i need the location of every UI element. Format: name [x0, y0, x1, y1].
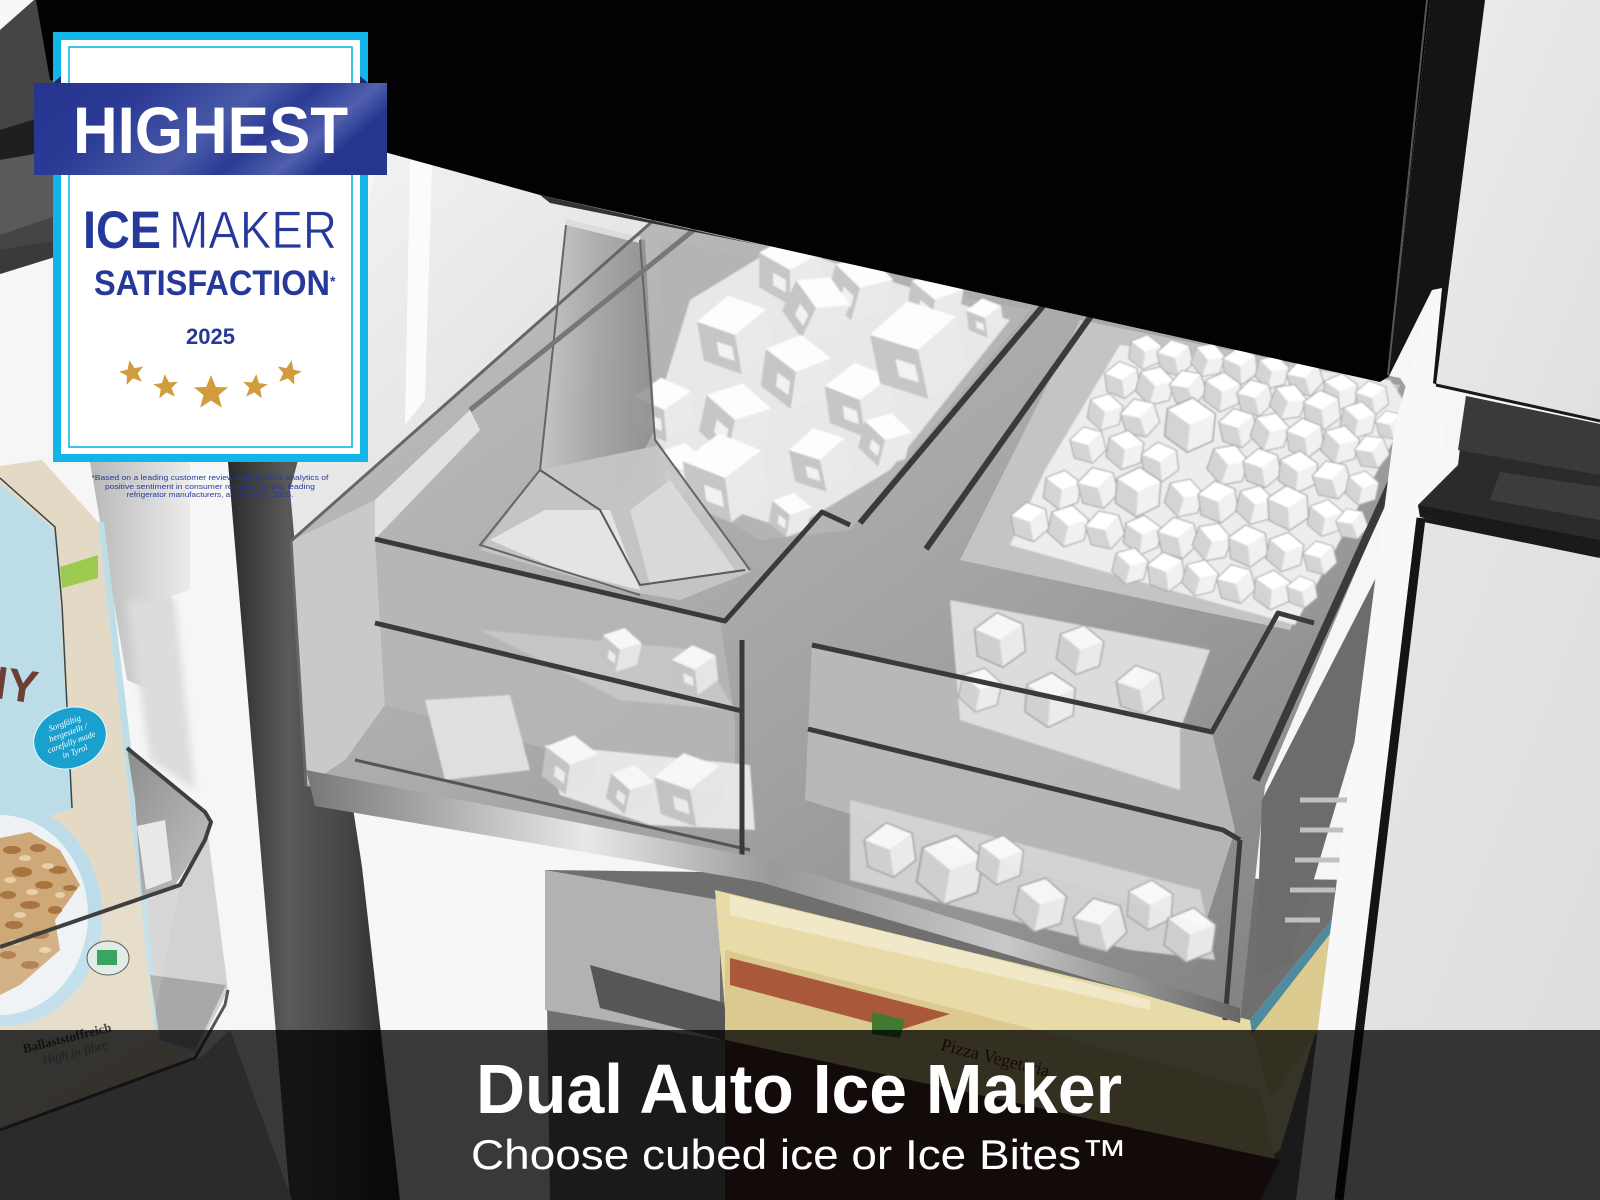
white wall below and above the drawer	[290, 150, 700, 1200]
big ice cubes in left bin	[633, 235, 1010, 541]
black rail between panels	[1418, 396, 1600, 556]
bottom caption bar	[0, 1030, 1600, 1200]
white side strip	[1296, 290, 1462, 1200]
ice drawer	[291, 219, 1423, 1023]
drawer front lip	[306, 770, 1240, 1023]
floor below door shelf	[0, 1030, 292, 1200]
nutrition text	[21, 1019, 117, 1072]
footnote: refrigerator manufacturers, as of April 1, 2025.	[126, 490, 294, 499]
satisfaction: SATISFACTION	[94, 264, 330, 303]
left bin front face	[375, 539, 735, 800]
drawer side rail with ribs	[1255, 560, 1385, 980]
seal: carefully made in Tyrol: in Tyrol	[61, 742, 89, 760]
drawer body	[291, 219, 1423, 1023]
asterisk: *	[330, 273, 336, 289]
ribbon	[34, 76, 387, 175]
caption title: Dual Auto Ice Maker	[476, 1050, 1122, 1128]
ice seen through left bin	[425, 624, 755, 833]
caption subtitle: Choose cubed ice or Ice Bites™	[471, 1131, 1127, 1178]
small ice bites in right bin	[1009, 333, 1410, 625]
door gasket column	[228, 462, 400, 1200]
nutrition text: High in fibre	[40, 1037, 109, 1068]
left bin ice floor	[660, 240, 1030, 540]
seal: carefully made in Tyrol	[25, 697, 115, 779]
footnote: *Based on a leading customer review aggregator's analytics of	[91, 473, 329, 482]
black door panel	[36, 0, 1486, 385]
cereal box	[0, 460, 195, 1130]
right bin front face	[805, 645, 1235, 925]
left freezer wall	[0, 0, 195, 790]
seal: carefully made in Tyrol: Sorgfältig	[47, 713, 82, 733]
pizza box text: Pizza Vegetaria	[939, 1034, 1052, 1081]
footnote: positive sentiment in consumer reviews, among leading	[105, 482, 315, 491]
year: 2025	[186, 324, 235, 349]
right bin ice floor	[960, 320, 1400, 630]
drawer left corner glass	[291, 500, 385, 786]
lower drawer with pizza boxes	[545, 870, 1360, 1200]
seal: carefully made in Tyrol: hergestellt /	[47, 720, 90, 744]
energy label	[87, 941, 129, 975]
badge frame	[53, 32, 368, 462]
five gold stars	[117, 358, 304, 408]
icemaker wordmark: MAKER	[169, 201, 337, 260]
cereal bowl	[0, 804, 102, 1026]
right upper panel	[1436, 0, 1600, 421]
ice seen through right bin	[850, 600, 1218, 966]
ice scoop	[480, 220, 750, 600]
icemaker wordmark: ICE	[83, 201, 161, 260]
icemaker wordmark	[83, 201, 337, 260]
right lower panel	[1339, 518, 1600, 1200]
seal: carefully made in Tyrol: carefully made	[46, 728, 97, 755]
ribbon: HIGHEST	[73, 93, 348, 167]
door shelf bin	[0, 748, 228, 1130]
nutrition text: Ballaststoffreich	[21, 1019, 114, 1056]
award badge	[34, 32, 387, 462]
bin rims and divider lines	[291, 219, 1423, 1020]
